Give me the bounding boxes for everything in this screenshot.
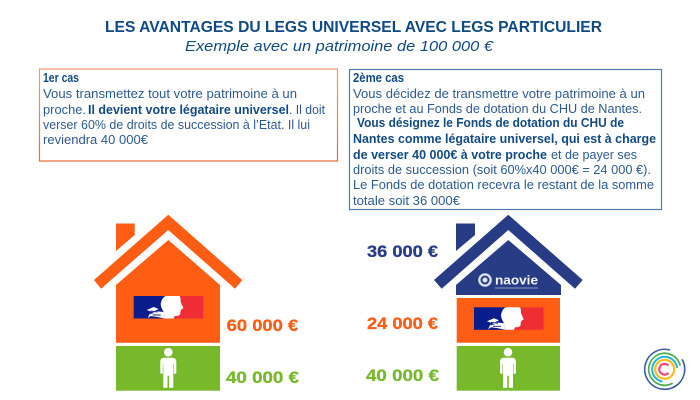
panel: 1er cas: proche.: [43, 103, 86, 117]
heir share of house: [116, 346, 220, 391]
panel: 2ème cas: totale soit 36 000€: [353, 194, 460, 208]
fund share of house: [456, 240, 561, 295]
panel: 2ème cas: proche et au Fonds de dotation du CHU de Nantes.: [353, 102, 642, 116]
logo: rings: [637, 342, 692, 397]
panel: 2ème cas: [350, 70, 662, 210]
icon: person: [500, 348, 516, 388]
title: LES AVANTAGES DU LEGS UNIVERSEL AVEC LEGS PARTICULIER: [105, 19, 602, 36]
icon: roof and chimney: [94, 215, 242, 289]
subtitle: Exemple avec un patrimoine de 100 000 €: [185, 38, 494, 55]
panel: 2ème cas: 2ème cas: [353, 71, 404, 85]
panel: 1er cas: 1er cas: [43, 71, 79, 85]
logo: naovie: naovie: [495, 273, 538, 288]
state share of house: [116, 240, 220, 343]
panel: 2ème cas: Nantes comme légataire universel, qui est à charge: [353, 132, 656, 146]
amount: 60 000: 60 000 €: [227, 317, 298, 335]
heir share of house: [457, 346, 560, 391]
icon: Marianne flag: [134, 296, 203, 318]
icon: Marianne flag: [474, 307, 544, 330]
panel: 1er cas: verser 60% de droits de succession à l’Etat. Il lui: [43, 118, 310, 132]
panel: 2ème cas: Vous décidez de transmettre votre patrimoine à un: [353, 87, 645, 101]
amount: 24 000: 24 000 €: [367, 315, 438, 333]
panel: 1er cas: Il devient votre légataire universel: [88, 103, 289, 117]
amount: 40 000: 40 000 €: [226, 369, 299, 387]
panel: 2ème cas: de verser 40 000€ à votre proche: [353, 148, 547, 162]
panel: 2ème cas: Vous désignez le Fonds de dotation du CHU de: [357, 116, 624, 130]
amount: 40 000: 40 000 €: [366, 367, 439, 385]
panel: 1er cas: [40, 69, 338, 161]
panel: 1er cas: . Il doit: [289, 103, 326, 117]
panel: 1er cas: Vous transmettez tout votre patrimoine à un: [43, 87, 297, 101]
state share of house: [457, 298, 560, 343]
icon: roof and chimney: [434, 215, 583, 289]
panel: 1er cas: reviendra 40 000€: [43, 133, 148, 147]
panel: 2ème cas: et de payer ses: [551, 148, 637, 162]
house: cas 1: [94, 215, 242, 391]
house: cas 2: [434, 215, 583, 391]
icon: person: [160, 348, 176, 388]
logo: naovie: [478, 273, 538, 288]
amount: 36 000: 36 000 €: [367, 243, 438, 261]
panel: 2ème cas: droits de succession (soit 60%x40 000€ = 24 000 €).: [353, 163, 651, 177]
panel: 2ème cas: Le Fonds de dotation recevra le restant de la somme: [353, 178, 654, 192]
